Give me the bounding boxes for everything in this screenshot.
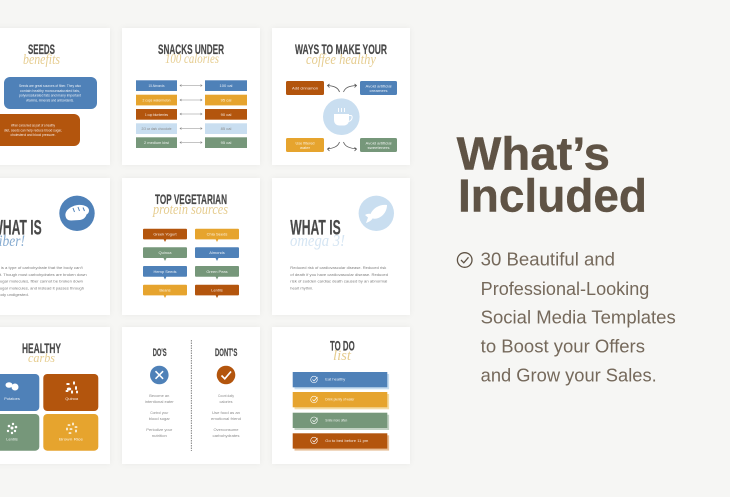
do's list: Periodize your <box>146 428 173 432</box>
icon: bread circle <box>59 196 95 231</box>
don'ts list: carbohydrates <box>212 434 240 438</box>
box: avoid artificial sweeteners <box>360 138 397 152</box>
icon: check circle <box>457 253 472 267</box>
row: almonds: 100 cal <box>220 83 233 88</box>
box: avoid artificial creamers: creamers <box>370 88 388 93</box>
panel: ways to make your coffee healthy <box>272 28 410 165</box>
script subheading: protein sources: protein sources <box>152 202 228 218</box>
panel: snacks under 100 calories <box>122 28 260 165</box>
heading: healthy: HEALTHY <box>22 340 61 356</box>
row: blueberries: 1 cup blueberries <box>145 112 168 117</box>
box: avoid artificial sweeteners: sweeteners <box>368 145 390 150</box>
box: use filtered water: water <box>300 145 311 150</box>
do's list: blood sugar <box>149 417 171 421</box>
title: what's included: What’s <box>457 127 610 179</box>
description text: Professional-Looking <box>481 279 649 299</box>
heading: snacks under: SNACKS UNDER <box>158 41 224 57</box>
heading: top vegetarian: TOP VEGETARIAN <box>155 191 227 207</box>
box: avoid artificial creamers: Avoid artificial <box>366 83 392 88</box>
icon: fish circle <box>359 196 394 231</box>
row: dark chocolate: 2/3 oz dark chocolate <box>142 126 172 131</box>
heading: ways to make your: WAYS TO MAKE YOUR <box>295 41 387 57</box>
box: avoid artificial sweeteners: Avoid artificial <box>366 140 392 145</box>
icon: check circle <box>217 366 235 384</box>
orange text box: When consumed as part of a healthy <box>11 124 55 128</box>
heading: what is: WHAT IS <box>290 216 341 239</box>
row: almonds: 15 Almonds <box>148 83 164 88</box>
do's list: nutrition <box>152 434 167 438</box>
script subheading: 100 calories: 100 calories <box>165 52 219 67</box>
don'ts list: calories <box>220 400 233 404</box>
row: blueberries <box>136 109 247 120</box>
don'ts list <box>211 394 241 438</box>
don'ts list: emotional friend <box>211 417 241 421</box>
panel: what is fiber <box>0 178 110 315</box>
don'ts list: Use food as an <box>212 411 240 415</box>
box: avoid artificial creamers <box>360 81 397 95</box>
tag: hemp seeds: Hemp Seeds <box>153 269 177 274</box>
row: kiwi: 95 cal <box>221 140 231 145</box>
box: add cinnamon: Add cinnamon <box>292 86 318 90</box>
task: go to bed before 11 pm: Go to bed before 11 pm <box>325 438 369 443</box>
row: kiwi: 2 medium kiwi <box>144 140 169 145</box>
do's list <box>145 394 175 438</box>
row: almonds <box>136 80 247 91</box>
box: use filtered water <box>286 138 324 152</box>
body text: heart rhythm. <box>290 287 313 291</box>
blue text box: contain healthy monounsaturated fats, <box>20 89 80 93</box>
tile: lentils: Lentils <box>6 436 18 442</box>
tile: potatoes: Potatoes <box>4 396 20 401</box>
don'ts list: Overconsume <box>214 428 238 432</box>
tag: greek yogurt: Greek Yogurt <box>153 232 178 236</box>
description text: 30 Beautiful and <box>481 250 615 270</box>
tag: quinoa: Quinoa <box>159 250 172 255</box>
description text: Social Media Templates <box>481 307 676 327</box>
script subheading: list: list <box>333 348 352 364</box>
heading: don'ts: DONT'S <box>215 347 237 359</box>
row: blueberries: 90 cal <box>221 112 231 117</box>
arrows around coffee cup <box>328 84 356 151</box>
description text: to Boost your Offers <box>481 336 645 356</box>
panel: healthy carbs <box>0 327 110 464</box>
panel: top vegetarian protein sources <box>122 178 260 315</box>
blue text box: Seeds are great sources of fiber. They also <box>19 84 81 88</box>
row: kiwi <box>136 137 247 148</box>
task: eat healthy: Eat healthy <box>325 376 345 382</box>
icon: coffee cup circle <box>323 98 360 135</box>
body text: risk of sudden cardiac death caused by an abnormal <box>290 280 387 284</box>
tag: beans: Beans <box>159 288 171 292</box>
description text <box>481 250 676 386</box>
box: use filtered water: Use filtered <box>296 140 314 145</box>
body text <box>290 266 388 291</box>
description text: and Grow your Sales. <box>481 366 657 386</box>
blue text box: polyunsaturated fats and many important <box>19 94 81 98</box>
script subheading: omega 3: omega 3! <box>290 231 345 250</box>
script subheading: benefits: benefits <box>23 52 60 68</box>
row: watermelon <box>136 95 247 105</box>
blue text box: vitamins, minerals and antioxidants. <box>26 98 74 102</box>
tile: brown rice: Brown Rice <box>59 436 84 442</box>
don'ts list: Count daily <box>218 394 234 398</box>
thumbnail grid <box>0 28 410 464</box>
panel: do's and don'ts <box>122 327 260 464</box>
tile: quinoa: Quinoa <box>65 396 79 401</box>
tag: green peas: Green Peas <box>206 269 228 274</box>
title: what's included <box>457 127 647 222</box>
do's list: intentional eater <box>145 400 175 404</box>
icon: cross circle <box>150 366 169 384</box>
do's list: Control your <box>150 411 169 415</box>
row: watermelon: 95 cal <box>221 98 231 102</box>
row: watermelon: 2 cups watermelon <box>142 98 170 102</box>
row: dark chocolate: 85 cal <box>221 126 231 131</box>
body text: of death if you have cardiovascular disease. Reduced <box>290 273 388 277</box>
body text <box>0 266 87 297</box>
script subheading: coffee healthy: coffee healthy <box>306 52 376 68</box>
row: dark chocolate <box>136 123 247 134</box>
heading: to do: TO DO <box>330 337 355 353</box>
heading: do's: DO'S <box>153 347 167 359</box>
panel: what is omega 3 <box>272 178 410 315</box>
task: smile more often: Smile more often <box>325 417 347 422</box>
script subheading: carbs: carbs <box>28 350 55 365</box>
blue text box <box>4 77 97 109</box>
body text: Reduced risk of cardiovascular disease. Reduced risk <box>290 266 386 270</box>
tag: chia seeds: Chia Seeds <box>207 232 227 236</box>
tag: almonds: Almonds <box>209 250 225 255</box>
do's list: Become an <box>149 394 169 398</box>
panel: to do list <box>272 327 410 464</box>
task: drink plenty of water: Drink plenty of water <box>325 396 355 402</box>
tag: lentils: Lentils <box>211 288 223 292</box>
orange text box: diet, seeds can help reduce blood sugar, <box>4 128 62 132</box>
orange text box: cholesterol and blood pressure. <box>10 133 56 137</box>
title: what's included: Included <box>458 170 647 222</box>
heading: seeds: SEEDS <box>28 41 55 57</box>
orange text box <box>0 114 80 146</box>
panel: seeds benefits <box>0 28 110 165</box>
